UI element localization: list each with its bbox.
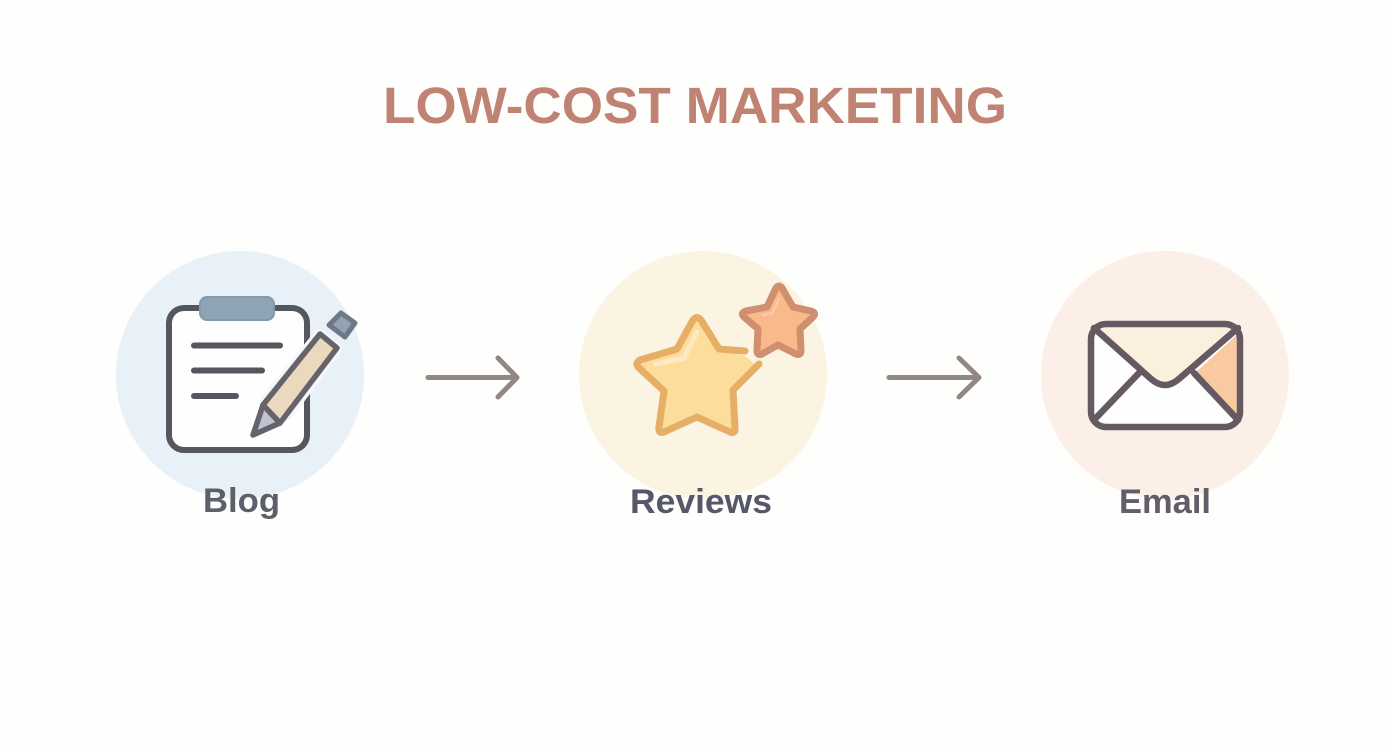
envelope fold lines — [1094, 328, 1238, 420]
large star — [637, 318, 757, 431]
envelope outline — [1091, 324, 1240, 427]
panel: email — [1041, 251, 1289, 521]
arrow: blog to reviews — [428, 358, 517, 397]
clipboard sheet — [169, 308, 307, 450]
reviews background circle — [579, 251, 827, 499]
email background circle — [1041, 251, 1289, 499]
small star — [742, 286, 815, 354]
text lines — [194, 346, 280, 396]
large star highlight — [656, 332, 697, 364]
label: Email: Email — [1119, 483, 1211, 521]
icon: stars — [637, 286, 815, 432]
pencil — [253, 313, 355, 435]
panel: reviews — [579, 251, 827, 521]
icon: envelope — [1091, 323, 1241, 427]
blog background circle — [116, 251, 364, 499]
panel: blog — [116, 251, 364, 520]
icon: clipboard with pencil — [169, 297, 355, 450]
envelope right fold — [1195, 332, 1240, 422]
label: Blog: Blog — [203, 482, 280, 520]
clipboard clip — [200, 297, 274, 320]
envelope flap — [1094, 326, 1238, 386]
envelope body — [1091, 323, 1241, 427]
small star highlight — [763, 299, 779, 315]
label: Reviews: Reviews — [630, 483, 772, 521]
arrow: reviews to email — [889, 358, 979, 397]
title: LOW-COST MARKETING — [383, 77, 1007, 134]
